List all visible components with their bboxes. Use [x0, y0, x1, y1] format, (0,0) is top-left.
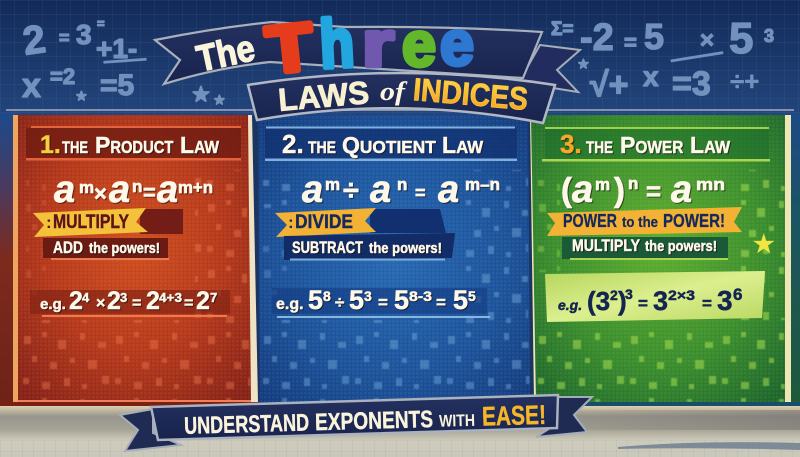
band behind multiply [140, 209, 183, 234]
banner: understand exponents with ease: WITH [439, 411, 475, 431]
formula: quotient law: a [302, 169, 323, 211]
math doodles left: +1- [96, 33, 137, 64]
formula: product law: m+n [178, 178, 213, 197]
example: product law: = [184, 295, 193, 312]
math doodles right: 5 [729, 14, 753, 63]
example: quotient law: = [436, 293, 446, 312]
heading: product law: THE [62, 139, 88, 157]
math doodles right: √+ [590, 66, 629, 104]
heading: product law: P [95, 132, 110, 158]
example: quotient law: ÷ [335, 293, 344, 312]
example: quotient law: = [378, 293, 388, 312]
example: power law: 3 [653, 286, 668, 316]
example: power law: 2 [610, 287, 618, 303]
formula: power law: mn [696, 175, 725, 194]
math doodles right [551, 14, 774, 104]
instruction: subtract the powers: SUBTRACT [292, 238, 363, 257]
icon: yellow star: ★ [753, 231, 775, 258]
example: quotient law: e.g. [276, 296, 304, 313]
math doodles right: ★ [578, 57, 589, 71]
ribbon: power to the power [547, 207, 742, 236]
example: quotient law [272, 285, 490, 318]
ribbon: multiply [33, 208, 148, 237]
instruction: subtract the powers [284, 233, 455, 260]
example: product law: 3 [120, 290, 127, 305]
heading: quotient law: 2. [282, 129, 304, 159]
example: power law: e.g. [558, 297, 582, 313]
ribbon: power to the power: to the [622, 214, 658, 231]
math doodles left: =5 [100, 69, 134, 102]
ribbon: divide [275, 208, 376, 237]
panel: the quotient law [258, 115, 530, 402]
instruction: add the powers: the powers! [89, 241, 160, 257]
math doodles right: -2 [580, 17, 614, 59]
panel: the product law [13, 115, 258, 402]
banner: understand exponents with ease: UNDERSTAND [184, 409, 309, 440]
example: power law: 6 [733, 285, 742, 304]
formula: product law: = [143, 180, 156, 205]
formula: power law: n [628, 174, 638, 193]
example: quotient law: 5 [394, 285, 409, 315]
math doodles right: x [643, 61, 659, 92]
heading: quotient law: UOTIENT [360, 137, 436, 157]
example: product law: 2 [107, 287, 121, 315]
side strips [0, 113, 800, 405]
heading: power law: AW [704, 137, 730, 157]
example: power law: 2×3 [668, 287, 695, 303]
title: Three: r [362, 8, 394, 80]
ribbon: power to the power: POWER [563, 210, 617, 231]
heading: quotient law: THE [308, 139, 336, 157]
formula: product law: a [109, 169, 130, 211]
math doodles left: ★ [192, 84, 210, 106]
formula: product law: a [157, 169, 178, 211]
math doodles right: =3 [672, 65, 711, 103]
example: product law [30, 287, 230, 317]
subtitle: laws of indices [277, 71, 529, 118]
ribbon: multiply: : [46, 213, 52, 232]
formula: product law: n [132, 177, 142, 196]
formula: quotient law: m–n [465, 175, 500, 194]
example: product law: = [132, 295, 141, 312]
subtitle: laws of indices: INDICES [412, 71, 529, 117]
heading: power law: 3. [560, 129, 582, 159]
heading: quotient law: Q [342, 132, 360, 158]
example: power law: 3 [717, 285, 733, 316]
instruction: multiply the powers: MULTIPLY [572, 236, 641, 255]
heading: power law: L [690, 132, 704, 158]
instruction: multiply the powers [562, 236, 728, 260]
math doodles left: = [97, 16, 105, 31]
example: product law: 2 [146, 287, 160, 315]
math doodles left: ★ [214, 93, 225, 107]
panel: the power law [530, 115, 791, 402]
math doodles left [20, 16, 225, 107]
heading: quotient law: AW [456, 137, 484, 157]
title: Three [263, 5, 474, 87]
example: product law: e.g. [40, 296, 66, 313]
example: power law: 3 [625, 286, 633, 302]
math doodles right: 5 [644, 16, 664, 57]
example: product law: 4+3 [159, 290, 182, 305]
subtitle: laws of indices: LAWS [277, 74, 370, 118]
formula: quotient law: = [415, 183, 426, 203]
math doodles left: x [22, 67, 41, 105]
example: quotient law: 5 [468, 288, 476, 304]
heading: power law: P [620, 132, 635, 158]
ribbon: divide: : [288, 213, 294, 232]
subtitle: laws of indices: of [380, 77, 408, 106]
math doodles right: 3 [764, 26, 774, 46]
title ribbon: right tail [520, 45, 580, 92]
formula: quotient law: a [370, 169, 391, 211]
formula: power law: = [646, 176, 661, 206]
formula: quotient law: a [438, 169, 459, 211]
band behind divide [370, 209, 446, 233]
heading: power law: OWER [635, 137, 684, 157]
example: product law: 2 [196, 287, 210, 315]
math doodles left: =2 [50, 64, 75, 89]
example: power law [545, 271, 765, 322]
example: quotient law: 5 [349, 285, 364, 315]
formula: quotient law: n [397, 175, 407, 194]
ribbon: multiply: MULTIPLY [53, 212, 129, 233]
math doodles right: × [700, 27, 714, 54]
instruction: subtract the powers: the powers! [369, 241, 442, 257]
example: quotient law: 8-3 [409, 288, 432, 304]
formula: power law: ) [614, 171, 625, 208]
ribbon: divide: DIVIDE [295, 212, 353, 233]
banner: understand exponents with ease: EASE! [482, 400, 546, 432]
example: product law: 4 [82, 290, 90, 305]
title: The: The [193, 27, 258, 79]
formula: power law: a [671, 169, 692, 211]
heading: quotient law: L [442, 132, 456, 158]
formula: product law: m [79, 178, 94, 197]
instruction: add the powers: ADD [53, 238, 83, 257]
title: Three: h [318, 5, 356, 83]
math doodles left: = [59, 28, 70, 48]
title: Three: e [402, 10, 436, 80]
heading: product law: RODUCT [110, 137, 174, 157]
instruction: multiply the powers: the powers! [645, 239, 717, 255]
example: product law: 2 [69, 287, 83, 315]
math doodles left: 3 [76, 19, 92, 50]
math doodles right: = [624, 30, 637, 55]
bottom base line [0, 402, 800, 406]
example: power law: ) [618, 286, 627, 316]
formula: quotient law: ÷ [343, 175, 359, 207]
example: quotient law: 5 [453, 285, 468, 315]
example: quotient law: 5 [308, 285, 323, 315]
example: quotient law: 8 [323, 288, 331, 304]
title: Three: T [263, 9, 317, 87]
math doodles left: 2 [20, 17, 48, 64]
math doodles left: ★ [76, 89, 87, 103]
title: Three: e [440, 9, 474, 79]
example: power law: (3 [587, 286, 610, 316]
math doodles right: ÷+ [730, 66, 759, 96]
formula: power law: m [595, 175, 610, 194]
example: product law: × [96, 295, 105, 312]
heading: power law: THE [586, 139, 613, 157]
ribbon: power to the power: POWER! [663, 210, 725, 231]
formula: product law: a [54, 169, 75, 211]
formula: quotient law: m [325, 175, 340, 194]
title ribbon: lower [248, 73, 555, 123]
example: quotient law: 3 [364, 288, 372, 304]
heading: product law: L [180, 132, 194, 158]
instruction: add the powers [43, 238, 169, 260]
title ribbon: main [155, 22, 542, 84]
banner: understand exponents with ease [120, 395, 592, 451]
example: product law: 7 [210, 290, 217, 305]
heading: product law: AW [194, 137, 219, 157]
banner: understand exponents with ease: EXPONENTS [315, 406, 433, 436]
heading: product law: 1. [40, 131, 61, 159]
math doodles right: Σ= [551, 19, 574, 40]
formula: product law: × [94, 181, 107, 206]
example: power law: = [702, 294, 712, 313]
bottom paper wash [0, 406, 800, 457]
background: blueprint grid [0, 0, 800, 115]
formula: power law: a [572, 169, 593, 211]
formula: power law: ( [561, 171, 572, 208]
example: power law: = [638, 294, 648, 313]
